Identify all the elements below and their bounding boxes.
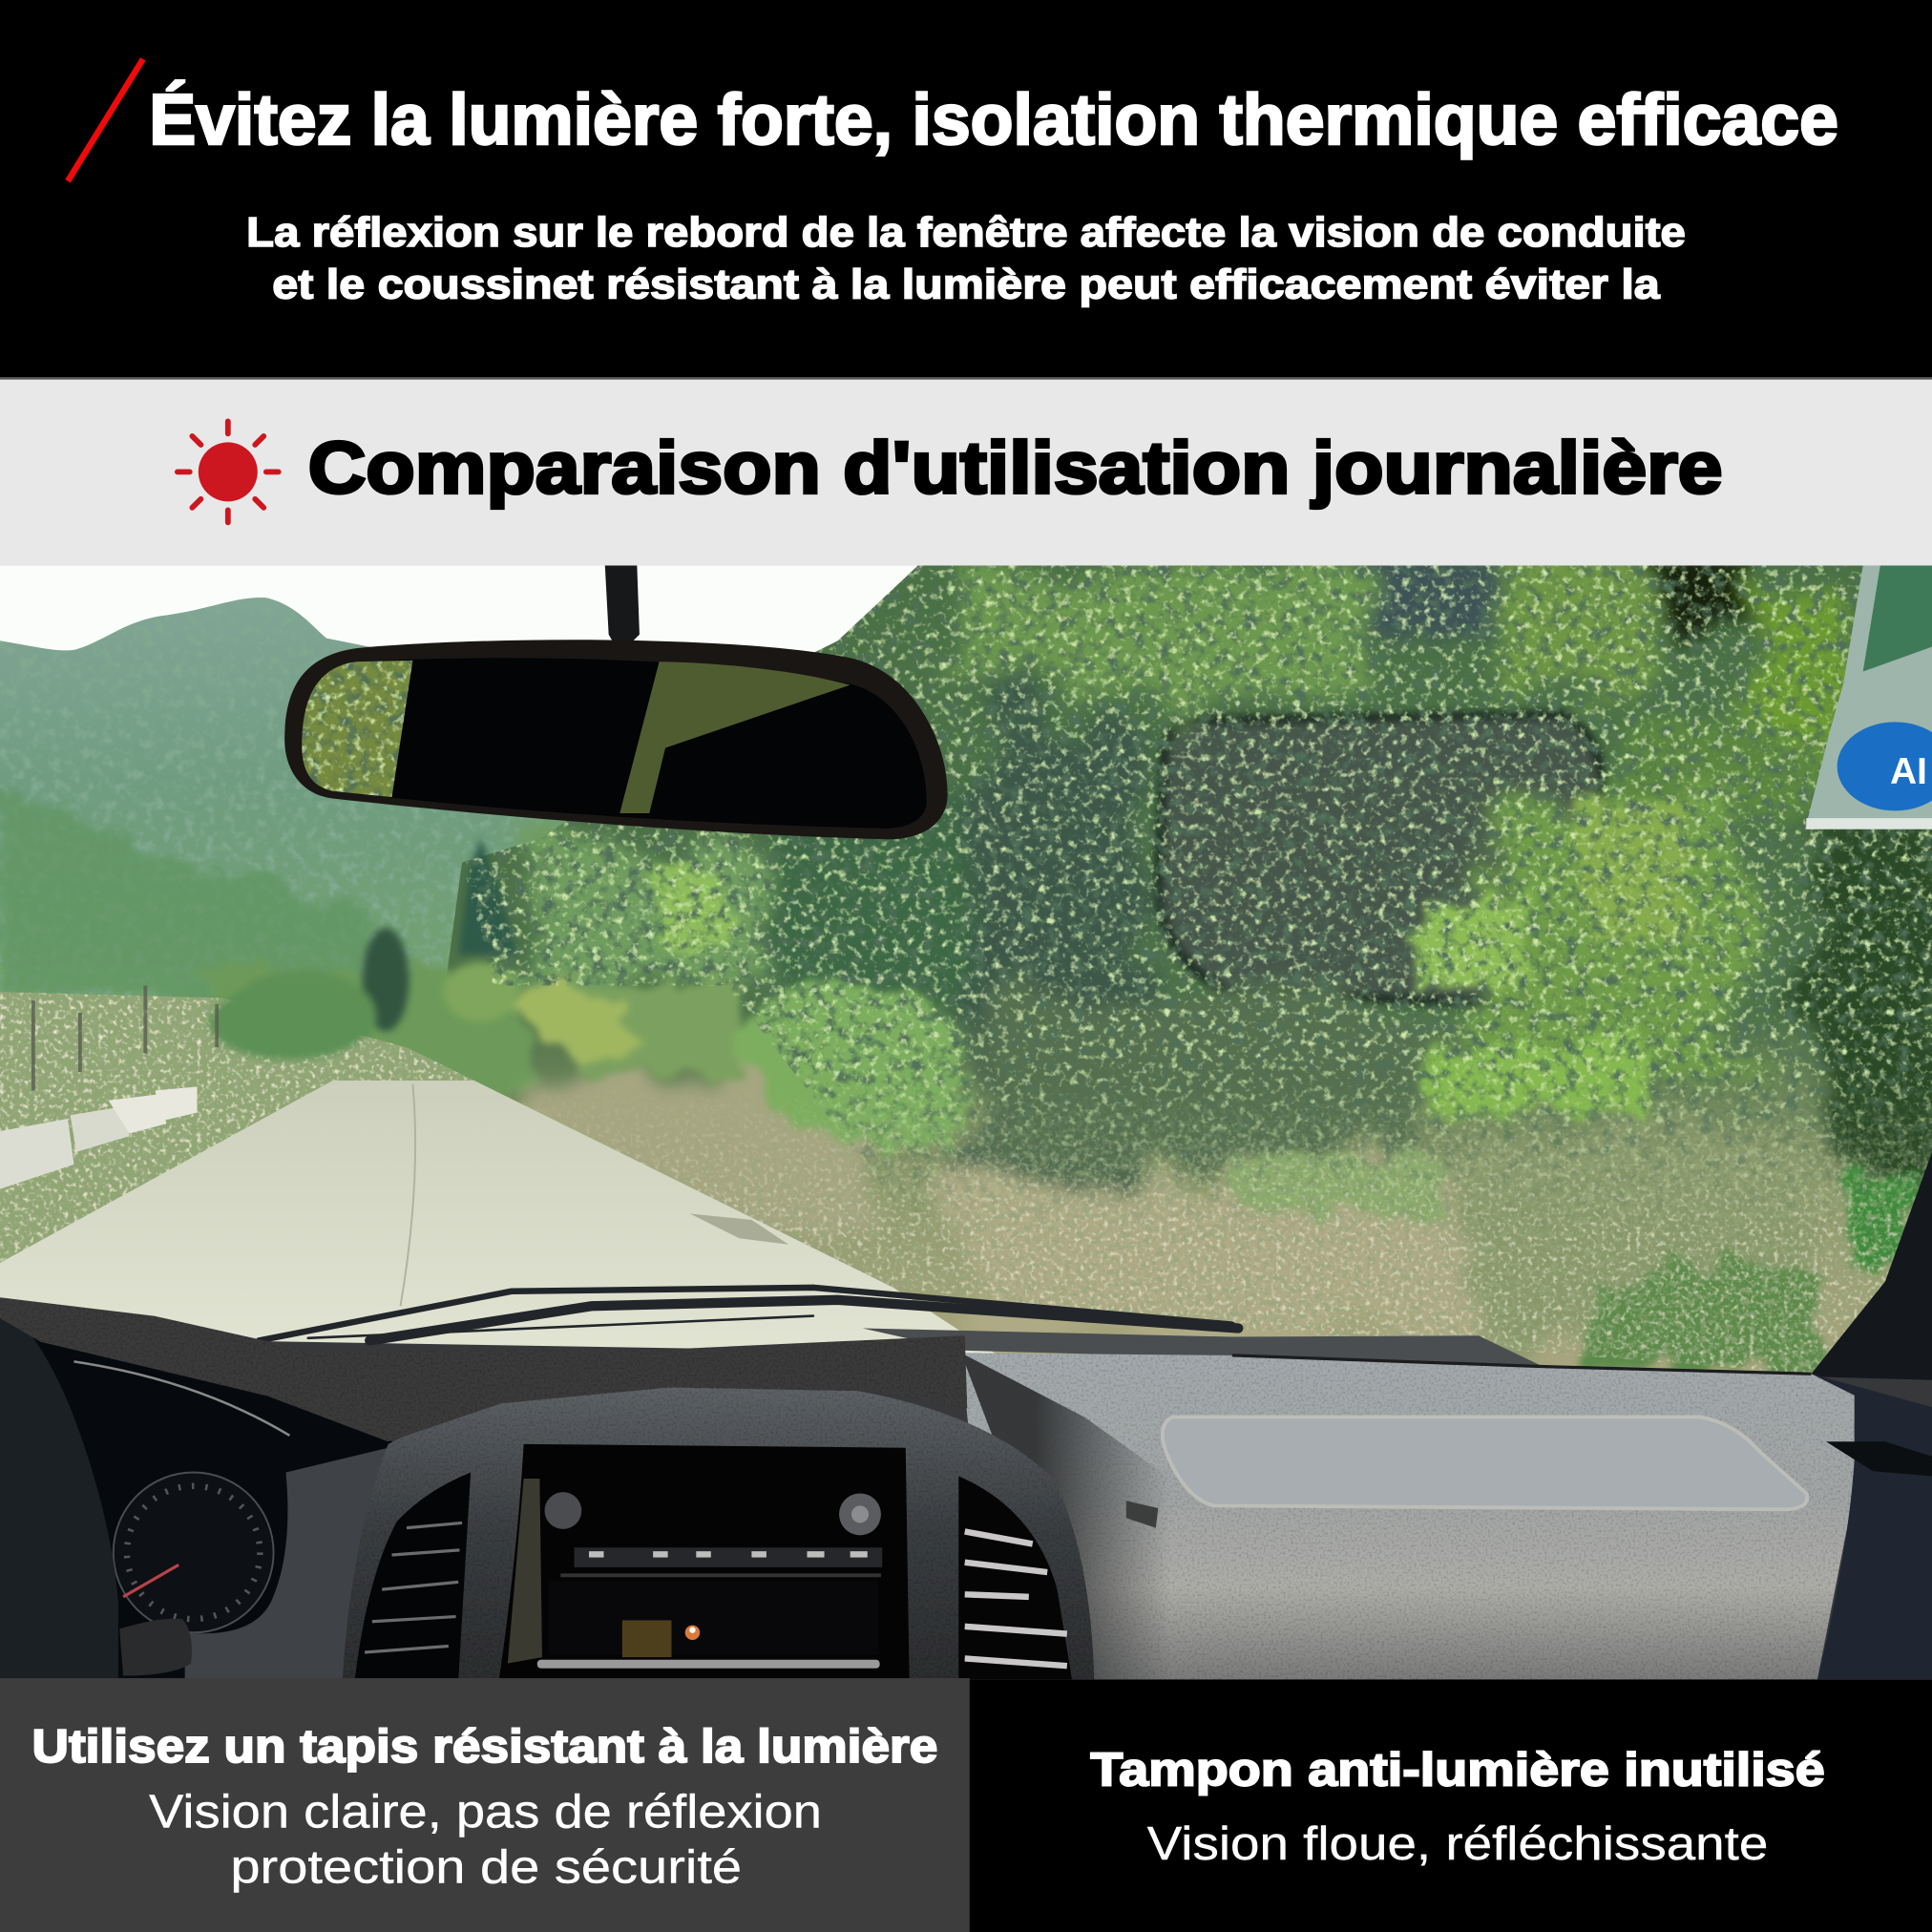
roadside tree mass: [209, 974, 530, 1090]
right air vent: [958, 1476, 1072, 1679]
panel: comparison heading band: [0, 377, 1932, 565]
dashboard shade beside vent: [961, 1353, 1170, 1679]
sky: [0, 565, 1932, 1679]
mirror reflection left: [302, 661, 412, 797]
cypress and dark trees: [246, 838, 517, 1035]
icon: red slash: [68, 59, 143, 181]
wipers: [259, 1288, 1238, 1340]
vegetation background: [444, 565, 1932, 1398]
mountain: [0, 598, 567, 998]
dashboard base: [0, 1337, 1932, 1679]
panel: black header: [0, 0, 1932, 377]
dashboard top: [961, 1353, 1860, 1679]
sticker on windshield: AI: [1890, 751, 1927, 792]
rearview mirror: [284, 640, 948, 839]
speedometer: [114, 1473, 274, 1632]
title: Évitez la lumière forte, isolation thermique efficace: [149, 79, 1838, 159]
subtitle: [246, 209, 1686, 307]
right panel heading: Tampon anti-lumière inutilisé: [1090, 1744, 1825, 1796]
hood chrome line: [74, 1361, 289, 1436]
sticker on windshield: [1805, 565, 1932, 830]
left roadside: [0, 992, 474, 1263]
road: [0, 1081, 998, 1355]
wiper arm: [863, 1329, 1541, 1365]
left air vent: [355, 1473, 471, 1679]
roadside bushes: [209, 986, 369, 1060]
instrument hood: [0, 1337, 407, 1679]
right A-pillar: [1812, 1152, 1932, 1411]
left panel heading: Utilisez un tapis résistant à la lumière: [32, 1721, 937, 1773]
foliage patches: [530, 542, 1932, 1343]
steering wheel: [0, 1301, 118, 1679]
heading: Comparaison d'utilisation journalière: [308, 427, 1723, 509]
right dash slot: [1826, 1441, 1932, 1476]
dark right dash: [1812, 1374, 1932, 1679]
anti-glare dash mat: [0, 1297, 967, 1441]
foliage texture: [462, 565, 1932, 1257]
lower hillside trees: [0, 788, 369, 998]
glove box lid: [1163, 1417, 1807, 1509]
left panel description: protection de sécurité: [230, 1841, 742, 1893]
rearview mirror stem: [605, 565, 640, 643]
dashboard small label: [1126, 1501, 1158, 1528]
icon: red sun: [178, 421, 279, 522]
column stalk knob: [119, 1619, 192, 1676]
road crack and shadow: [401, 1084, 415, 1306]
left panel description: Vision claire, pas de réflexion: [149, 1786, 822, 1838]
fence posts: [33, 986, 217, 1090]
panel: windshield photo: [0, 542, 1932, 1679]
instrument bezel: [185, 1448, 394, 1679]
subtitle: et le coussinet résistant à la lumière peut efficacement éviter la: [272, 261, 1660, 307]
left panel description: [149, 1786, 822, 1893]
panel: without anti-glare mat: [970, 1681, 1932, 1932]
dashboard reflection on windshield: [1158, 715, 1602, 1004]
concrete road edge blocks: [0, 1086, 198, 1189]
centre console bezel: [343, 1377, 1094, 1679]
dry grass texture: [535, 1095, 1932, 1373]
mirror reflection left texture: [302, 653, 419, 801]
radio unit: [499, 1444, 910, 1679]
subtitle: La réflexion sur le rebord de la fenêtre affecte la vision de conduite: [246, 209, 1686, 256]
panel: with anti-glare mat: [0, 1678, 970, 1932]
mirror reflection right: [620, 662, 850, 813]
left roadside texture: [0, 992, 474, 1263]
windshield base shadow line: [1232, 1355, 1812, 1374]
right panel description: Vision floue, réfléchissante: [1147, 1818, 1768, 1870]
